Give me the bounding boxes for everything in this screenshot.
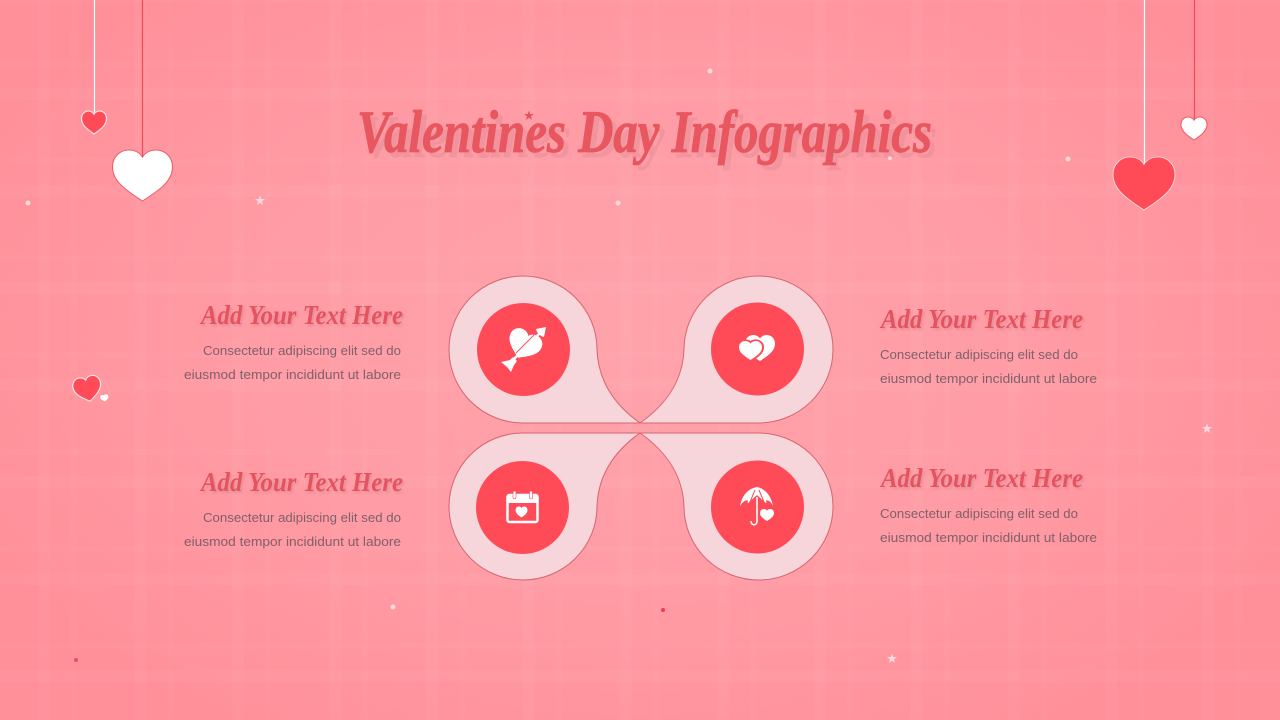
text block: bottom left: Consectetur adipiscing elit sed do (203, 511, 401, 525)
text block: top left: Consectetur adipiscing elit sed do (203, 344, 401, 358)
icon badge: calendar with heart (476, 461, 569, 554)
text block: bottom right: eiusmod tempor incididunt ut labore (880, 531, 1097, 545)
hanging heart: large white left (112, 0, 172, 201)
petal: bottom right (640, 433, 833, 580)
petal: top right (640, 276, 833, 423)
decorative stars and dots (26, 68, 1212, 663)
text block: top left (184, 300, 403, 382)
text block: bottom left: Add Your Text Here (199, 467, 403, 497)
text block: top left: Add Your Text Here (199, 300, 403, 330)
hanging heart: small white right (1181, 0, 1207, 140)
text block: bottom right (879, 463, 1097, 545)
petal diagram (449, 276, 833, 580)
text block: top right: Consectetur adipiscing elit sed do (880, 348, 1078, 362)
petal: bottom left (449, 433, 640, 580)
text block: top right (879, 304, 1097, 386)
hanging heart: small red left (82, 0, 106, 134)
text block: top right: Add Your Text Here (879, 304, 1083, 334)
icon badge: two hearts (711, 302, 804, 396)
hanging heart: large red right (1113, 0, 1175, 210)
title: Valentines Day Infographics (357, 99, 932, 165)
text block: bottom left: eiusmod tempor incididunt ut labore (184, 535, 401, 549)
petal: top left (449, 276, 640, 423)
text block: top right: eiusmod tempor incididunt ut labore (880, 372, 1097, 386)
text block: bottom right: Consectetur adipiscing elit sed do (880, 507, 1078, 521)
icon badge: umbrella with heart (711, 460, 804, 554)
floating hearts left (71, 374, 110, 404)
icon badge: heart with arrow (477, 303, 570, 396)
text block: bottom right: Add Your Text Here (879, 463, 1083, 493)
text block: bottom left (184, 467, 403, 549)
text block: top left: eiusmod tempor incididunt ut labore (184, 368, 401, 382)
